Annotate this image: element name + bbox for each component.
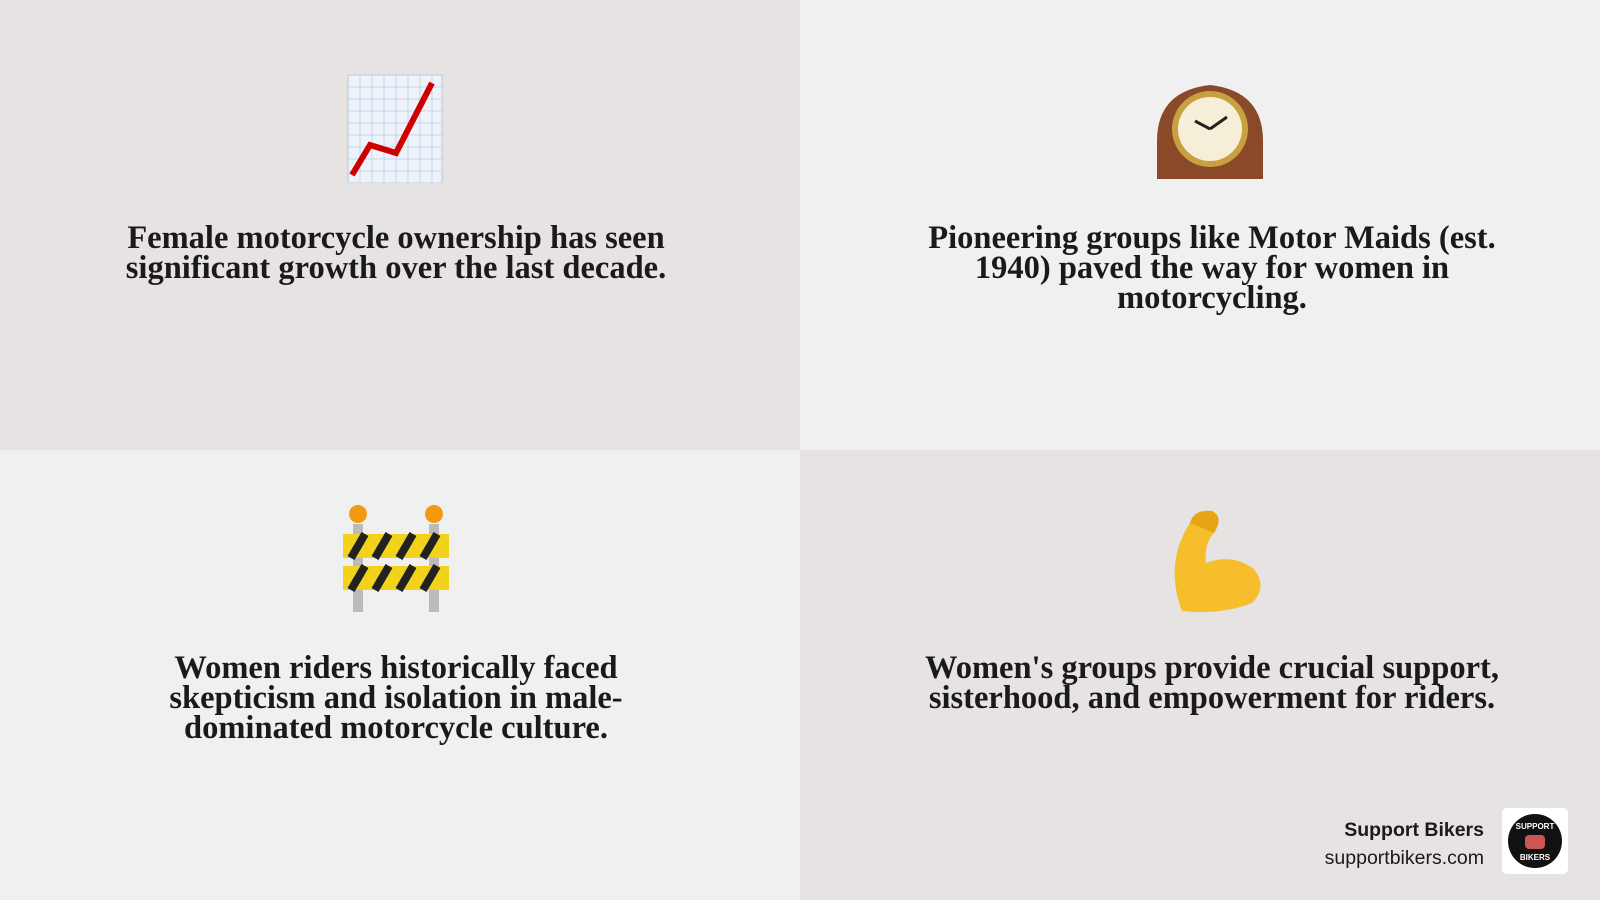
text: challenges xyxy=(169,650,623,746)
brand text xyxy=(1325,819,1484,869)
text: history: motorcycling. xyxy=(1117,280,1307,316)
text: challenges: dominated motorcycle culture. xyxy=(184,710,608,746)
panel: empowerment xyxy=(800,450,1600,900)
brand text: supportbikers.com xyxy=(1325,847,1484,869)
panel: challenges xyxy=(0,450,800,900)
text: growth xyxy=(126,220,666,286)
text: empowerment: sisterhood, and empowerment for riders. xyxy=(929,680,1495,716)
icon: clock xyxy=(1157,85,1263,179)
brand text: Support Bikers xyxy=(1344,819,1484,841)
icon: flexed biceps xyxy=(1174,510,1260,612)
text: challenges: Women riders historically faced xyxy=(174,650,618,686)
text: growth: significant growth over the last decade. xyxy=(126,250,666,286)
icon: barrier xyxy=(343,505,449,612)
footer brand xyxy=(1325,808,1568,874)
text: growth: Female motorcycle ownership has seen xyxy=(127,220,665,256)
panel: growth xyxy=(0,0,800,450)
icon: chart xyxy=(348,74,442,183)
logo xyxy=(1502,808,1568,874)
text: history: 1940) paved the way for women in xyxy=(975,250,1449,286)
text: empowerment xyxy=(925,650,1499,716)
text: history xyxy=(928,220,1496,316)
text: challenges: skepticism and isolation in male- xyxy=(169,680,623,716)
text: history: Pioneering groups like Motor Maids (est. xyxy=(928,220,1496,256)
logo: SUPPORT BIKERS xyxy=(1516,822,1554,862)
panel: history xyxy=(800,0,1600,450)
text: empowerment: Women's groups provide crucial support, xyxy=(925,650,1499,686)
